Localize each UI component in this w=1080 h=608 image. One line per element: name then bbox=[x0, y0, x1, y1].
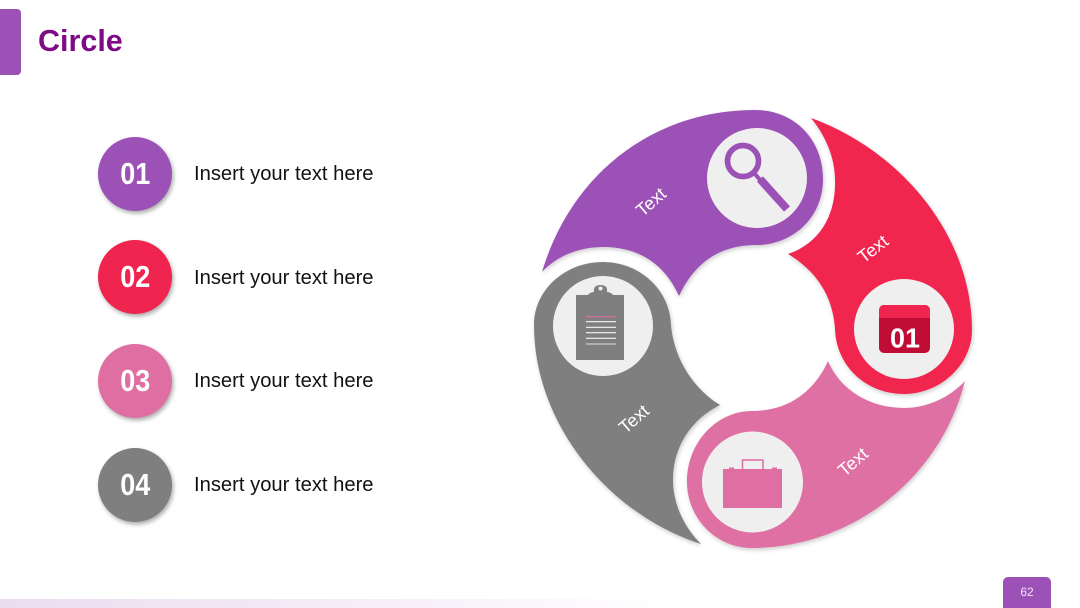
footer gradient band bbox=[0, 599, 1080, 608]
segment: pink briefcase bbox=[687, 361, 965, 548]
pink teardrop shape bbox=[687, 361, 965, 548]
icon: briefcase bbox=[723, 460, 782, 508]
title accent tab bbox=[0, 9, 21, 75]
segment: purple search bbox=[542, 110, 823, 296]
page number tab: 62 bbox=[1020, 585, 1034, 599]
badge 04 bbox=[98, 448, 172, 522]
gray icon disc bbox=[553, 276, 653, 376]
title: Circle bbox=[38, 24, 123, 58]
pink segment label: Text bbox=[834, 444, 872, 480]
badge 01 bbox=[98, 137, 172, 211]
list item 01 bbox=[97, 137, 374, 216]
page number tab bbox=[1003, 577, 1051, 608]
icon: calendar: 01 bbox=[890, 322, 920, 354]
text 02: Insert your text here bbox=[194, 267, 374, 289]
gray segment label: Text bbox=[615, 401, 653, 437]
badge 02 bbox=[98, 240, 172, 314]
purple teardrop shape bbox=[542, 110, 823, 296]
gray teardrop shape bbox=[534, 262, 720, 544]
pink icon disc bbox=[702, 432, 803, 532]
badge 01: 01 bbox=[120, 156, 150, 191]
text 04: Insert your text here bbox=[194, 474, 374, 496]
icon: calendar bbox=[879, 305, 930, 354]
purple icon disc bbox=[707, 128, 807, 228]
list item 04 bbox=[97, 448, 374, 527]
icon: magnifying glass bbox=[728, 146, 787, 209]
list item 03 bbox=[97, 344, 374, 423]
text 03: Insert your text here bbox=[194, 370, 374, 392]
purple segment label: Text bbox=[632, 184, 670, 220]
red icon disc bbox=[854, 279, 954, 379]
red segment label: Text bbox=[854, 231, 892, 267]
icon: clipboard bbox=[576, 285, 624, 360]
text 01: Insert your text here bbox=[194, 163, 374, 185]
red teardrop shape bbox=[788, 118, 972, 394]
badge 02: 02 bbox=[120, 259, 150, 294]
segment: gray clipboard bbox=[534, 262, 720, 544]
badge 03 bbox=[98, 344, 172, 418]
badge 04: 04 bbox=[120, 467, 150, 502]
segment: red calendar bbox=[788, 118, 972, 394]
badge 03: 03 bbox=[120, 363, 150, 398]
list item 02 bbox=[97, 240, 374, 319]
